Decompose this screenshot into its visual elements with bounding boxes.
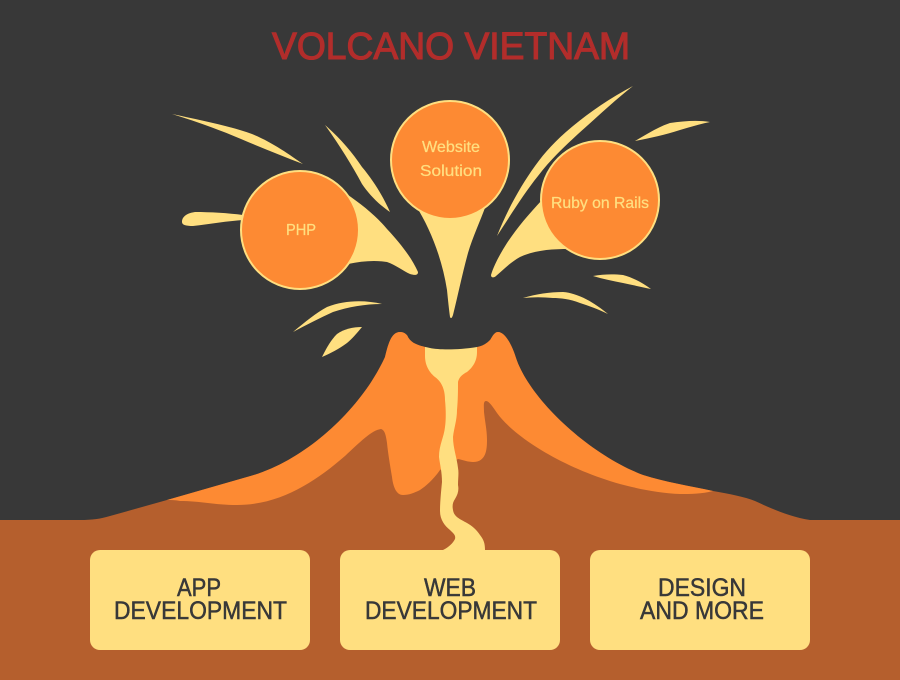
bubble: ruby on rails [541,141,659,259]
card: design and more: AND MORE [640,597,764,625]
crater opening [406,330,496,349]
card: design and more: DESIGN [658,574,746,602]
bubble: website solution: Solution [420,163,482,180]
volcano mountain [80,332,810,520]
bubble: php: PHP [286,222,316,239]
splash: php jet [345,193,418,275]
card: app development [90,550,310,650]
bubble: php [241,171,359,289]
card: app development: APP [177,574,221,602]
splash: upper right streak [635,121,710,141]
card: design and more [590,550,810,650]
bubble: website solution: Website [422,139,480,156]
splash: lower centre right streak [523,292,608,314]
splash: php tail left [182,212,243,226]
card: app development: DEVELOPMENT [114,597,287,625]
ground [0,520,900,680]
bubble: website solution [391,101,509,219]
title: VOLCANO VIETNAM [272,26,630,68]
splash: lower left streak [293,301,382,332]
card: web development: WEB [424,574,476,602]
lava glow: orange slope [167,332,713,505]
bubble: ruby on rails: Ruby on Rails [551,195,649,212]
splash: ruby jet [491,200,569,277]
splash: upper left streak [325,125,390,212]
lava stream [425,340,485,550]
splash: website jet [416,205,486,318]
card: web development [340,550,560,650]
splash: lower right streak [593,274,651,289]
card: web development: DEVELOPMENT [365,597,537,625]
splash: long right streak [497,86,633,236]
splash: lower left leaf [322,327,362,357]
splash: far left streak [172,114,303,164]
